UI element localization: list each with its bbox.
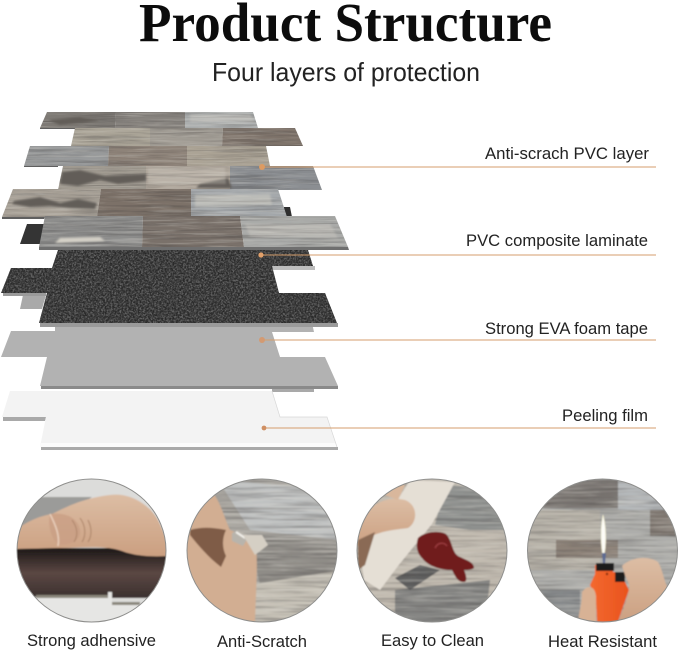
label: heat resistant: Heat Resistant	[548, 633, 657, 651]
lighter flame	[601, 515, 606, 563]
layer: PVC composite laminate	[0, 207, 340, 327]
photo circle: easy to clean red stain	[355, 476, 510, 626]
photo circle: heat resistant lighter	[526, 476, 679, 626]
callout: peeling film	[262, 407, 656, 430]
subtitle: Four layers of protection	[212, 57, 480, 87]
label: strong adhensive: Strong adhensive	[27, 632, 156, 650]
tile row 4	[58, 166, 322, 190]
photo circle: strong adhesive hand pressing panel	[15, 476, 169, 626]
callout: PVC composite laminate: PVC composite laminate	[466, 232, 648, 250]
layer: EVA foam tape	[1, 266, 338, 389]
layer: peeling film	[2, 389, 338, 450]
callout: EVA foam tape: Strong EVA foam tape	[485, 320, 648, 338]
lighter body	[590, 563, 629, 622]
callout: EVA foam tape	[259, 320, 656, 343]
label: easy to clean: Easy to Clean	[381, 632, 484, 650]
label: anti-scratch: Anti-Scratch	[217, 633, 307, 651]
tile row 2	[71, 128, 303, 146]
callout: peeling film: Peeling film	[562, 407, 648, 425]
tile row 1	[40, 112, 258, 128]
callout: anti-scratch PVC layer	[259, 145, 656, 170]
callout: PVC composite laminate	[258, 232, 656, 258]
callout: anti-scratch PVC layer: Anti-scrach PVC layer	[485, 145, 650, 163]
exploded layer diagram	[0, 110, 350, 450]
photo circle: anti-scratch ring on wood	[185, 476, 340, 626]
layer: anti-scratch PVC wood tiles	[0, 110, 350, 250]
tile row 3	[24, 146, 270, 166]
tile row 5	[2, 189, 287, 217]
tile row 6	[39, 216, 348, 247]
